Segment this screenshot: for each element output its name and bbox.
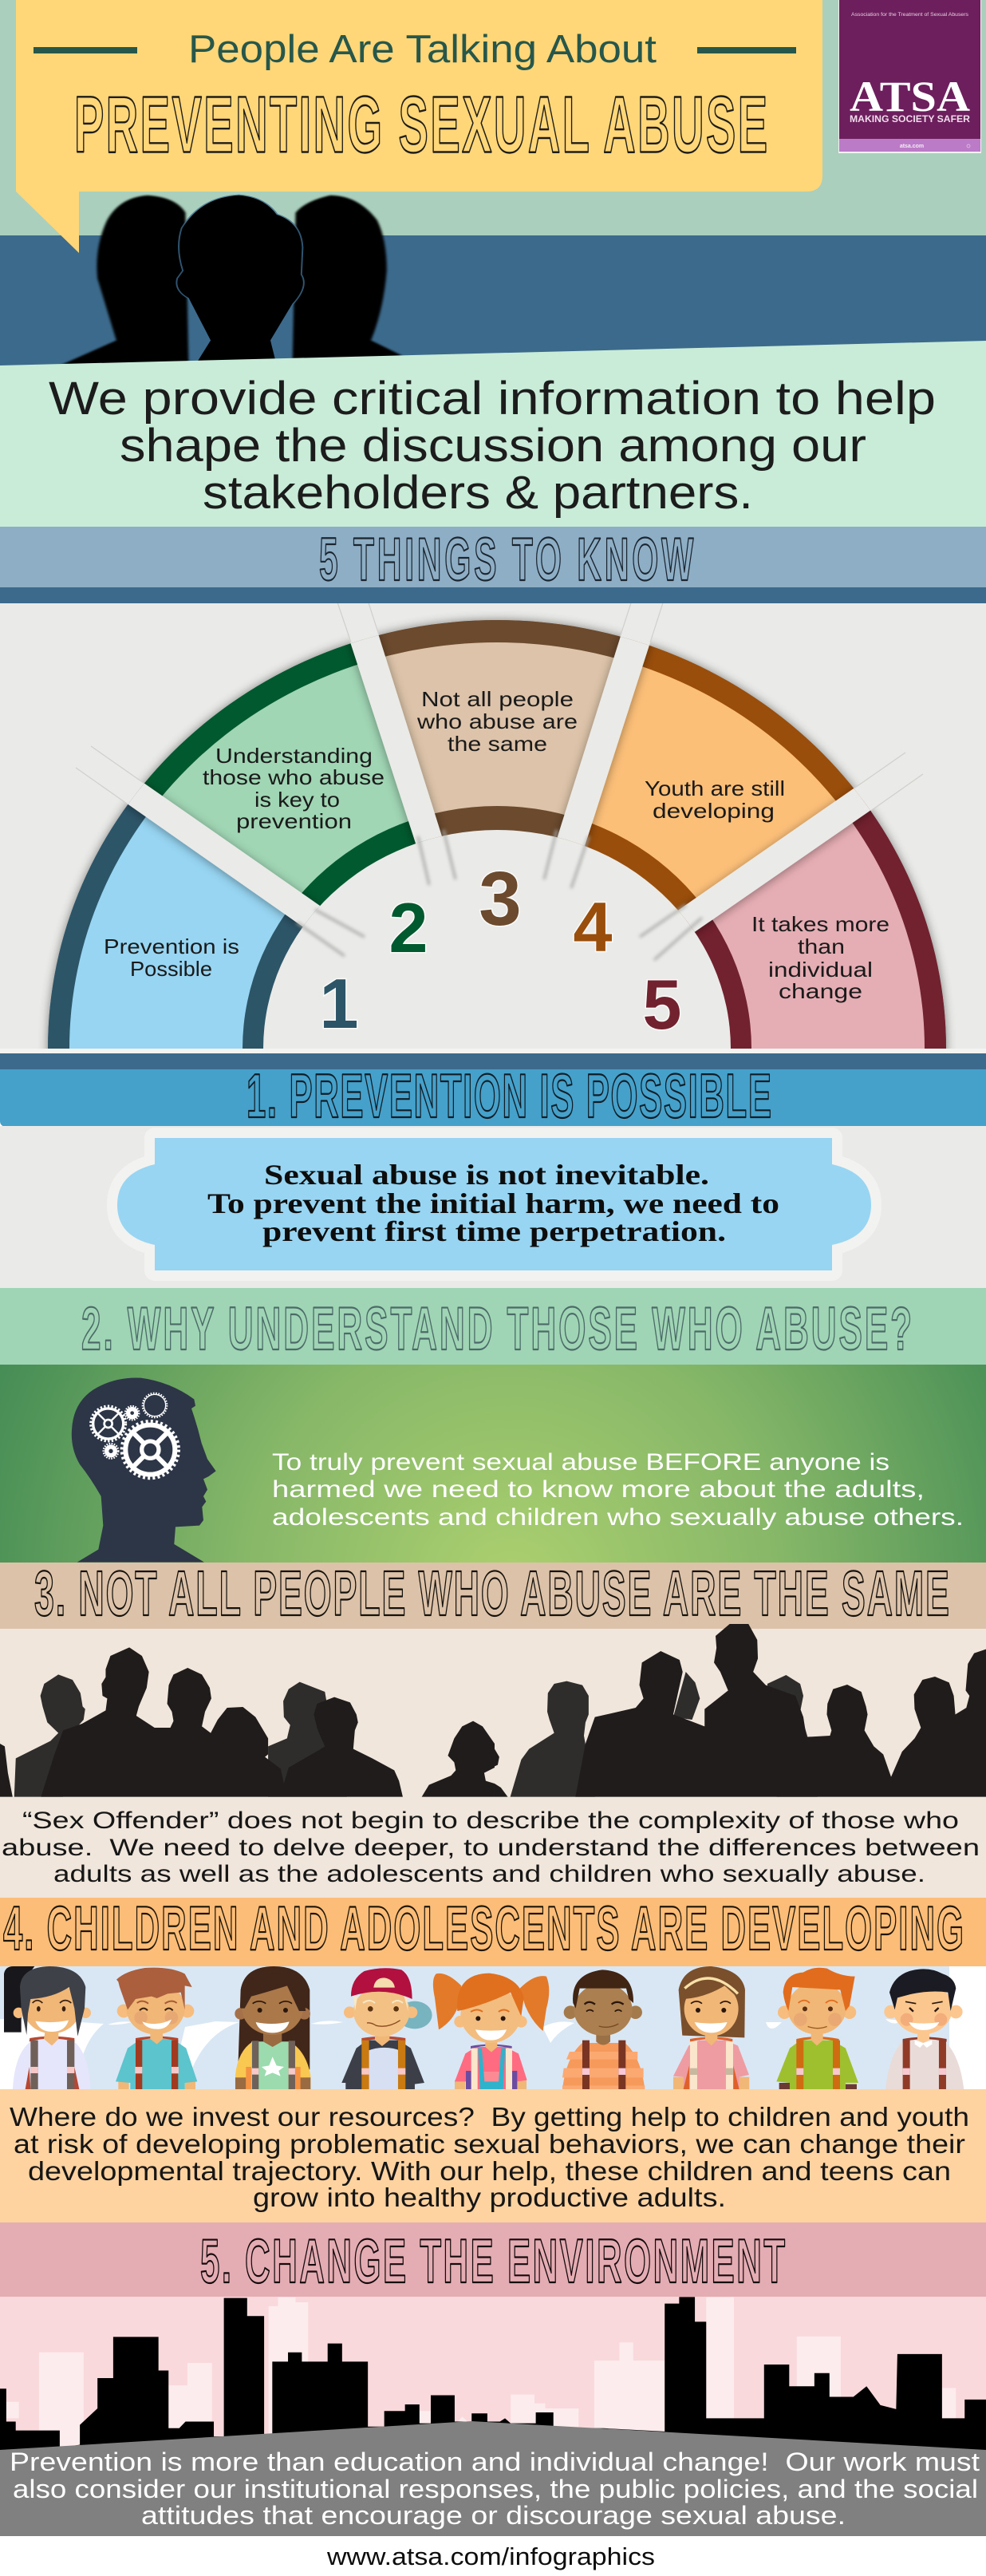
text block: invest resources: developmental trajectory. With our help, these children and teens can [28, 2156, 951, 2186]
text block: statement: shape the discussion among our [120, 420, 866, 472]
icon: crowd silhouette left [0, 1647, 495, 1797]
child 6 [562, 1970, 645, 2089]
text block: prevention is more: also consider our institutional responses, the public policies, and the social [13, 2475, 978, 2503]
text block: why understand: adolescents and children who sexually abuse others. [272, 1504, 964, 1531]
child 3 [235, 1966, 310, 2089]
numbers 1 to 5: 1 [320, 964, 358, 1043]
heading: 2. why understand those who abuse: 2. WHY UNDERSTAND THOSE WHO ABUSE? [81, 1296, 912, 1363]
text block: prevention is more: Prevention is more than education and individual change! Our work must [10, 2448, 980, 2476]
subtitle: People Are Talking About [188, 28, 657, 71]
child 7 [673, 1966, 749, 2089]
panel: five things fan diagram [0, 603, 986, 1053]
strip tips pointing into centre [297, 830, 702, 960]
child 2 [116, 1968, 197, 2089]
panel: illustrated children [0, 1966, 986, 2089]
child 5 [433, 1973, 549, 2089]
label: understanding those who abuse: those who abuse [203, 765, 385, 789]
heading: 1. prevention is possible: 1. PREVENTION IS POSSIBLE [246, 1062, 771, 1131]
segment 2 [136, 640, 428, 916]
heading: 5 things to know [0, 526, 986, 603]
label: prevention is possible: Prevention is [104, 934, 239, 958]
segment 5 [686, 799, 946, 1049]
label: it takes more: than [798, 934, 845, 958]
icon: crowd silhouette right [495, 1624, 986, 1797]
label: prevention is possible: Possible [130, 957, 212, 981]
label: understanding those who abuse: Understanding [215, 744, 373, 768]
panel: mission statement [0, 341, 986, 527]
icon: head with gears [72, 1378, 216, 1563]
footer: website link: www.atsa.com/infographics [326, 2542, 655, 2570]
label: it takes more: It takes more [751, 912, 889, 936]
icon: three head silhouettes [60, 196, 403, 365]
label: not all people: the same [448, 732, 547, 756]
segment 4 [571, 642, 862, 921]
child 8 [776, 1968, 858, 2089]
text block: sex offender: adults as well as the adolescents and children who sexually abuse. [53, 1861, 925, 1887]
text block: why understand [272, 1449, 964, 1531]
child 4 [341, 1968, 432, 2089]
label: it takes more: individual [768, 958, 873, 982]
panel: not all the same [0, 1624, 986, 1898]
heading: 5 things to know: 5 THINGS TO KNOW [319, 526, 694, 594]
text block: sex offender: “Sex Offender” does not begin to describe the complexity of those who [22, 1808, 959, 1834]
label: youth are still developing: developing [653, 799, 775, 823]
text block: statement: We provide critical information to help [49, 373, 936, 425]
label: youth are still developing [645, 776, 785, 823]
icon: ATSA logo: atsa.com [900, 144, 924, 149]
text block: plaque message: prevent first time perpetration. [262, 1215, 726, 1247]
text block: invest resources [10, 2102, 969, 2212]
text block: prevention is more [10, 2448, 980, 2530]
label: it takes more [751, 912, 889, 1003]
heading: 5. change the environment: 5. CHANGE THE ENVIRONMENT [200, 2227, 785, 2296]
label: youth are still developing: Youth are still [645, 776, 785, 800]
icon: ATSA logo: ATSA [850, 73, 970, 121]
numbers 1 to 5: 4 [574, 887, 613, 966]
text block: prevention is more: attitudes that encourage or discourage sexual abuse. [141, 2501, 846, 2530]
icon: city skyline [0, 2297, 986, 2452]
label: understanding those who abuse [203, 744, 385, 833]
text block: plaque message [207, 1159, 779, 1247]
panel: change the environment skyline [0, 2297, 986, 2536]
segment 3 [361, 620, 638, 841]
label: understanding those who abuse: prevention [236, 809, 352, 833]
heading: 3. not all people who abuse are the same: 3. NOT ALL PEOPLE WHO ABUSE ARE THE SAME [34, 1557, 949, 1629]
numbers 1 to 5: 2 [389, 888, 428, 967]
text block: sex offender [2, 1808, 980, 1887]
heading: 4. children and adolescents are developing: 4. CHILDREN AND ADOLESCENTS ARE DEVELOPING [3, 1894, 964, 1963]
panel: prevention plaque [0, 1126, 986, 1288]
title: PREVENTING SEXUAL ABUSE [74, 81, 767, 170]
panel: understanding section [0, 1365, 986, 1563]
icon: ATSA logo [838, 0, 981, 153]
numbers 1 to 5 [320, 856, 681, 1044]
text block: plaque message: Sexual abuse is not inevitable. [264, 1159, 709, 1191]
label: prevention is possible [104, 934, 239, 981]
heading: 1. prevention is possible [0, 1053, 986, 1131]
text block: why understand: harmed we need to know more about the adults, [272, 1476, 925, 1503]
text block: statement: stakeholders & partners. [203, 467, 753, 519]
numbers 1 to 5: 5 [643, 965, 681, 1044]
text block: why understand: To truly prevent sexual abuse BEFORE anyone is [272, 1449, 889, 1476]
segment 1 [48, 793, 311, 1049]
text block: invest resources: Where do we invest our resources? By getting help to children and youth [10, 2102, 969, 2132]
panel: header background [0, 0, 986, 371]
panel: where do we invest [0, 2089, 986, 2223]
icon: ATSA logo: MAKING SOCIETY SAFER [850, 113, 970, 124]
text block: invest resources: grow into healthy productive adults. [253, 2183, 726, 2212]
callout: speech bubble header [16, 0, 822, 253]
heading: 5. change the environment [0, 2222, 986, 2297]
label: it takes more: change [779, 979, 862, 1003]
label: not all people: who abuse are [416, 709, 578, 733]
text block: sex offender: abuse. We need to delve deeper, to understand the differences between [2, 1835, 980, 1861]
child 1 [4, 1966, 91, 2089]
label: not all people [416, 687, 578, 756]
label: understanding those who abuse: is key to [254, 788, 340, 812]
label: not all people: Not all people [421, 687, 574, 711]
numbers 1 to 5: 3 [479, 856, 522, 942]
text block: plaque message: To prevent the initial harm, we need to [207, 1187, 779, 1219]
child 9 [884, 1969, 964, 2089]
text block: statement [49, 373, 936, 519]
icon: ATSA logo: Association for the Treatment of Sexual Abusers [851, 12, 969, 18]
text block: invest resources: at risk of developing problematic sexual behaviors, we can change their [14, 2129, 965, 2159]
